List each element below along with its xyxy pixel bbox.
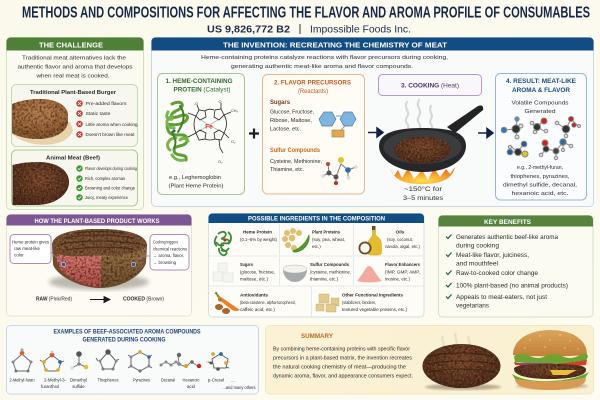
plus sign [249,128,259,138]
summary text: dynamic aroma, flavor, and appearance consumers expect. [273,374,413,380]
ingredient: plant proteins: (soy, pea, wheat, [312,237,345,242]
ingredient: flavor enhancers: (IMP, GMP, AMP, [385,269,420,274]
ingredient: plant proteins: Plant Proteins [312,230,340,235]
image: steaming patty [422,333,501,390]
cooked label: COOKED (Brown) [123,296,164,302]
molecule: thiophenes: Thiophenes [98,378,118,382]
panel: aroma compound examples [6,326,258,394]
result compounds caption: thiophenes, pyrazines, [510,174,570,180]
ingredient: oils: canola, algal, etc.) [385,244,420,249]
benefits checklist: Raw-to-cooked color change [456,271,539,277]
image: burger [512,330,589,390]
beef patty image [12,162,69,205]
summary text: By combining heme-containing proteins with specific flavor [273,346,410,352]
list: plant burger problems: Doesn't brown like meat [86,132,135,137]
molecule: dimethyl sulfide [70,351,88,389]
list: beef qualities: Browning and color change [85,186,136,190]
ingredient: sulfur compounds: thiamine, etc.) [310,277,338,282]
step 2 title [274,80,351,95]
benefits checklist: Appeals to meat-eaters, not just [456,295,547,301]
step 4 title: 4. RESULT: MEAT-LIKE [506,78,576,85]
panel: key benefits [438,216,593,317]
ingredient: antioxidants [215,292,296,314]
list: plant burger problems: Little aroma when cooking [86,122,138,127]
ingredient: other functional: textured vegetable proteins, etc.) [342,307,407,312]
raw to cooked patty cross-section [49,229,149,290]
molecule: 2-methyl-3-furanthiol: 2-Methyl-3- [44,378,67,382]
sugars list: Sugars [270,100,291,106]
ingredient: sugars: maltose, etc.) [240,277,269,282]
sulfur compounds list [270,148,322,173]
examples heading: EXAMPLES OF BEEF-ASSOCIATED AROMA COMPOUNDS [54,328,201,336]
raw label: RAW (Pink/Red) [36,296,72,302]
molecule: 2-methyl-furan: 2-Methyl-furan [10,378,35,382]
icon: volatile molecules [501,116,580,160]
ingredient: heme protein [215,230,277,255]
ingredient: antioxidants: caffeic acid, etc.) [240,307,276,312]
step 1 title [166,78,233,94]
sulfur compounds list: Sulfur Compounds [270,148,321,154]
challenge description: when real meat is cooked. [35,74,110,80]
ingredient: other functional [316,292,407,312]
icon: flame [390,167,455,184]
challenge description: authentic flavor and aroma that develops [18,64,133,70]
key benefits heading: KEY BENEFITS [484,219,532,226]
card: animal meat beef: Animal Meat (Beef) [46,156,100,162]
ingredient: oils: Oils [396,230,405,235]
arrow: precursors to cooking [368,128,383,137]
ingredient: sugars: (glucose, fructose, [240,269,275,274]
callout: heme protein colour: Heme protein gives [12,240,50,244]
molecule: pyrazines [128,350,152,382]
invention description: generating authentic meat-like aroma and flavor compounds. [231,64,413,70]
molecule: decanal: Decanal [161,378,175,382]
molecule: hexanoic acid [177,353,201,389]
molecule: dimethyl sulfide: sulfide [72,384,85,389]
invention heading: THE INVENTION: RECREATING THE CHEMISTRY OF MEAT [223,40,448,50]
icon: heme porphyrin structure: CH₃ [231,109,238,113]
ingredient: flavor enhancers: inosine, etc.) [385,277,410,282]
step 1 title: PROTEIN (Catalyst) [174,86,230,94]
molecule: hexanoic acid: Hexanoic [182,378,200,382]
icon: sulfur molecule [321,157,358,185]
list: beef qualities: Juicy, meaty experience [85,195,129,200]
molecule: 2-methyl-furan [10,348,35,382]
molecule: pyrazines: Pyrazines [133,378,150,382]
patent subtitle [207,24,411,36]
callout: cooking triggers reactions [131,234,189,270]
benefits checklist [446,234,568,310]
icon: heme porphyrin structure: O₂ [231,140,236,144]
card: animal meat beef [12,150,138,206]
benefits checklist: 100% plant-based (no animal products) [456,284,568,290]
callout: heme protein colour: raw meat-like [14,246,40,251]
cooking temperature caption: ~150°C for [404,186,442,193]
examples heading: GENERATED DURING COOKING [82,336,166,344]
molecule: p-cresol: p-Cresol [208,378,224,382]
summary text: the natural cooking chemistry of meat—producing the [273,364,406,370]
ingredient: plant proteins: etc.) [312,244,321,249]
step 1 caption [168,175,224,190]
challenge description: Traditional meat alternatives lack the [22,56,127,62]
sugars list [270,100,314,132]
list: beef qualities [76,165,137,201]
step 2 title: (Reactants) [298,88,328,95]
step 1 caption: (Plant Heme Protein) [168,184,224,190]
molecule: 2-methyl-3-furanthiol: furanthiol [41,384,59,389]
card: traditional plant-based burger: Traditional Plant-Based Burger [30,90,117,96]
molecule: hexanoic acid: acid [187,384,196,389]
step 3 title box: 3. COOKING (Heat) [401,82,459,90]
icon: frying pan with patty [379,106,483,172]
invention description: Heme-containing proteins catalyze reactions with flavor precursors during cooking, [201,55,448,61]
molecule: 2-methyl-3-furanthiol [40,350,67,389]
callout: cooking triggers reactions: chemical reactions [153,246,188,252]
molecule: decanal [160,360,179,382]
and many others note: ... [231,378,235,382]
summary text [273,346,413,380]
panel: the invention [152,38,594,206]
volatile compounds label: Volatile Compounds [512,100,569,106]
panel: possible ingredients [208,214,424,317]
and many others note: ...and many others [222,385,256,390]
challenge heading: THE CHALLENGE [39,40,103,50]
and many others note [222,378,256,390]
ingredient: sulfur compounds [283,262,351,282]
step 4: result [496,74,586,200]
cooking temperature caption: 3–5 minutes [403,195,443,202]
volatile compounds label [512,100,569,115]
step 1: heme protein [158,74,244,194]
challenge description [18,56,133,80]
volatile compounds label: Generated [524,109,556,115]
step 4 title [506,78,576,94]
ingredient: flavor enhancers [357,262,420,282]
cooking temperature caption [403,186,443,202]
molecule: dimethyl sulfide: Dimethyl [70,378,87,382]
molecule: thiophenes [96,349,119,382]
ingredient: antioxidants: Antioxidants [240,292,268,297]
ingredient: antioxidants: (beta-carotene, alpha-tocopherol, [240,300,296,305]
step 4 title: AROMA & FLAVOR [512,87,571,94]
sulfur compounds list: Thiamine, etc. [270,167,304,173]
benefits checklist: and mouthfeel [456,262,498,268]
list: plant burger problems: Pre-added flavors [86,101,127,106]
plant burger image [12,99,73,145]
benefits checklist: vegetarians [456,304,489,310]
ingredient: plant proteins [282,228,345,252]
molecule: p-cresol [206,352,230,382]
how it works heading: HOW THE PLANT-BASED PRODUCT WORKS [34,218,160,225]
ingredient: sugars [213,262,275,282]
ingredient: heme protein: (0.1–5% by weight) [240,237,277,242]
ingredient: oils: (soy, coconut, [387,237,413,242]
icon: sugar rings [319,112,356,137]
result compounds caption [503,165,578,197]
sugars list: Ribose, Maltose, [270,118,312,124]
ingredient: flavor enhancers: Flavor Enhancers [385,262,420,267]
ingredient: other functional: Other Functional Ingredients [342,292,403,297]
icon: heme porphyrin structure: O [218,100,222,104]
callout: heme protein colour: color [14,252,24,258]
step 2 title: 2. FLAVOR PRECURSORS [274,80,351,86]
callout: cooking triggers reactions: → browning [153,260,176,265]
panel: how the plant-based product works [6,214,192,316]
ingredient: sulfur compounds: (cysteine, methionine, [310,269,351,274]
step 1 title: 1. HEME-CONTAINING [166,78,233,85]
sugars list: Glucose, Fructose, [270,110,314,116]
arrow: raw to cooked [90,296,110,302]
list: beef qualities: Rich, complex aromas [85,176,126,181]
ingredient: sulfur compounds: Sulfur Compounds [310,262,349,267]
benefits checklist: Meat-like flavor, juiciness, [456,253,529,259]
step 2: flavor precursors [262,74,364,194]
callout: cooking triggers reactions: → aroma, flavor, [153,253,184,258]
ingredient: heme protein: Heme Protein [243,230,272,235]
benefits checklist: during cooking [456,244,499,250]
arrow: cooking to result [478,128,493,138]
result compounds caption: dimethyl sulfide, decanal, [503,182,578,188]
invention description [201,55,448,70]
callout: heme protein colour [10,234,66,267]
summary text: precursors in a plant-based matrix, the invention recreates [273,356,412,362]
result compounds caption: hexanoic acid, etc. [512,191,569,197]
icon: heme porphyrin structure [188,100,238,164]
icon: heme porphyrin structure: O₂ [218,160,223,164]
callout: cooking triggers reactions: Cooking triggers [153,240,179,244]
icon: heme porphyrin structure: Fe [205,124,213,130]
list: plant burger problems [76,100,138,138]
summary heading: SUMMARY [301,333,333,340]
icon: steam [406,100,432,128]
step 3: cooking [378,74,483,202]
sulfur compounds list: Cysteine, Methionine, [270,159,322,165]
card: traditional plant-based burger [12,84,138,146]
icon: protein ribbon [167,102,188,160]
list: plant burger problems: Static taste [86,111,111,116]
list: beef qualities: Flavor develops during cooking [85,166,137,171]
examples heading [54,328,201,344]
ingredients heading: POSSIBLE INGREDIENTS IN THE COMPOSITION [248,216,385,222]
patent subtitle: US 9,826,772 B2 [207,24,290,36]
result compounds caption: e.g., 2-methyl-furan, [517,165,563,171]
icon: heme porphyrin structure: -O [194,102,198,106]
ingredient: sugars: Sugars [240,262,253,267]
ingredient: oils [358,226,420,255]
ingredient: other functional: (stabilizers, binders, [342,300,376,305]
patent subtitle: Impossible Foods Inc. [310,24,411,36]
step 1 caption: e.g., Leghemoglobin [169,175,221,181]
sugars list: Lactose, etc. [270,126,301,132]
benefits checklist: Generates authentic beef-like aroma [456,235,559,241]
panel: summary [266,326,594,394]
